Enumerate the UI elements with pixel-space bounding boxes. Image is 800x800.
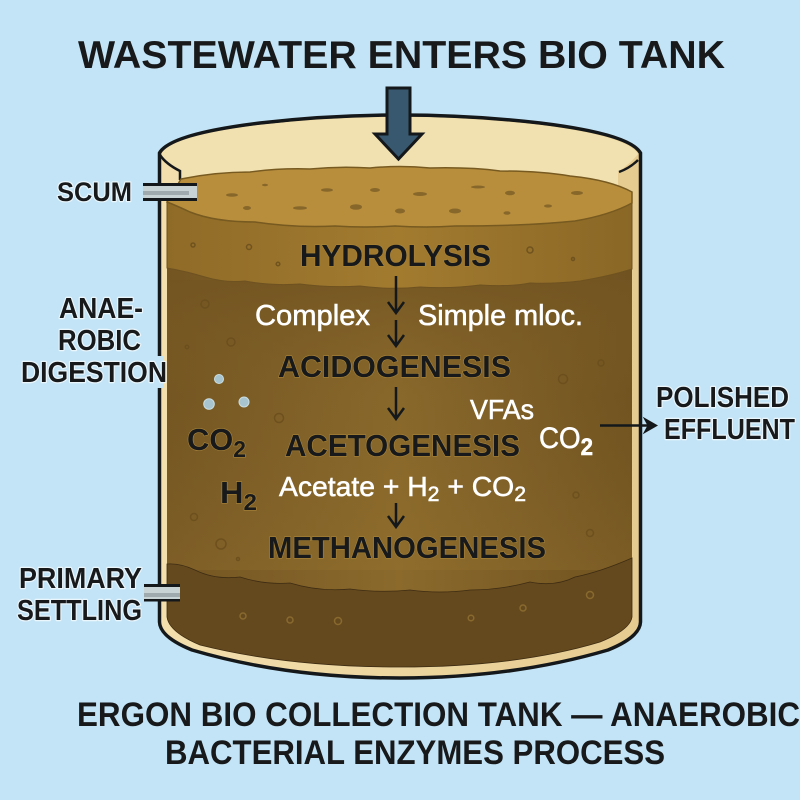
vfas text: VFAs [470,394,534,425]
methanogenesis stage: METHANOGENESIS [268,530,546,565]
complex text: Complex [255,300,370,332]
h2 label: H [220,475,242,510]
upper liquid layer [167,200,632,288]
footer caption: BACTERIAL ENZYMES PROCESS [165,734,665,772]
acetate products text: 2 [428,483,439,506]
polished effluent label: POLISHED [656,382,789,414]
inflow arrow [375,88,422,159]
tank outer shell [160,115,640,678]
h2 label: 2 [244,489,257,515]
co2 dark label: 2 [233,436,246,462]
rim edge strokes [160,155,638,180]
gas bubbles [204,374,249,409]
primary settling label: SETTLING [17,595,142,627]
footer caption [77,696,800,772]
co2 white label: CO [539,422,584,455]
scum flecks [226,184,583,215]
arrow: complex to acidogenesis [388,320,404,346]
anaerobic digestion label: DIGESTION [21,357,167,389]
scum layer [167,166,632,227]
acetogenesis stage: ACETOGENESIS [285,428,520,463]
sediment specks [185,243,604,560]
title: WASTEWATER ENTERS BIO TANK [78,34,725,77]
settled sludge specks [240,592,594,624]
arrow: acetate to methanogenesis [388,503,404,527]
acetate products text: + CO [439,471,514,502]
primary settling label [17,563,142,627]
arrow: acidogenesis down [388,387,404,419]
bio tank [160,115,640,678]
arrow: hydrolysis down [388,276,404,313]
scum pipe [143,183,197,201]
anaerobic digestion label: ROBIC [58,325,141,357]
simple molecules text: Simple mloc. [418,300,583,332]
acidogenesis stage: ACIDOGENESIS [278,349,511,384]
scum label: SCUM [57,177,132,207]
acetate products text: Acetate + H [279,471,426,502]
hydrolysis stage: HYDROLYSIS [300,238,491,273]
anaerobic digestion label: ANAE- [59,293,143,325]
polished effluent label [656,382,795,446]
acetate products text: 2 [514,483,526,506]
tank inner rim [162,117,638,190]
settled sludge layer [167,558,632,667]
anaerobic digestion label [21,293,167,389]
co2 white label: 2 [581,434,593,461]
co2 dark label: CO [187,422,234,457]
effluent arrow [600,418,657,433]
lower sludge interior [167,200,632,667]
primary settling label: PRIMARY [19,563,142,595]
lower sludge shading [167,280,632,570]
settling pipe [144,584,180,602]
